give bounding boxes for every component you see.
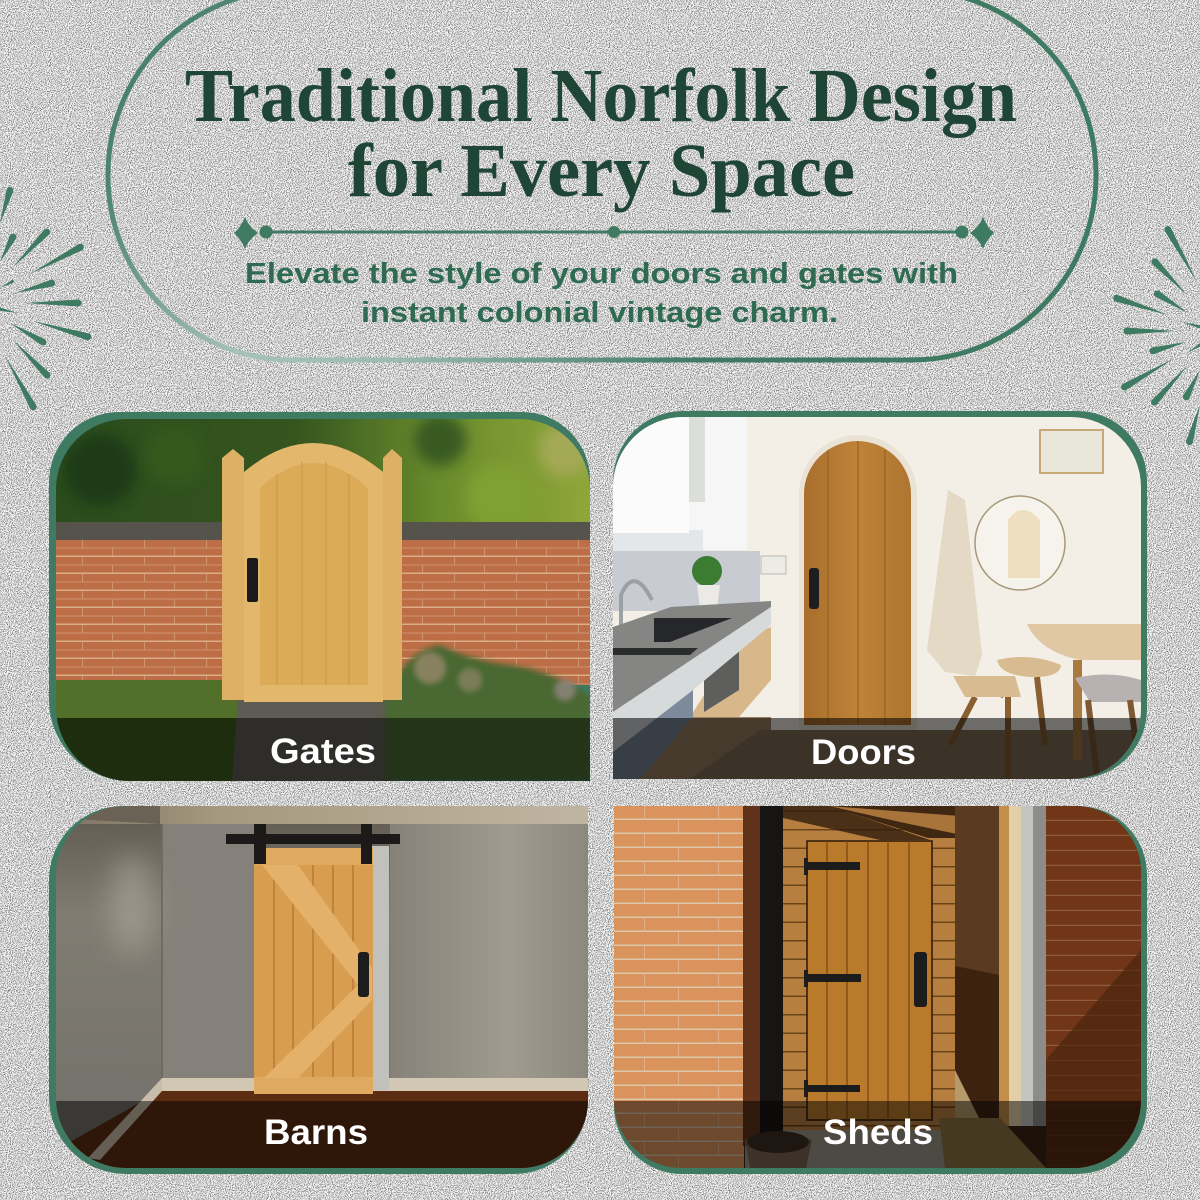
floor and baseboards [56, 1078, 588, 1168]
panel: gates [49, 412, 591, 782]
right sunburst icon [1112, 225, 1200, 446]
label band [614, 1101, 1141, 1168]
gate [222, 443, 402, 702]
label band [56, 718, 590, 781]
light switch [761, 556, 786, 574]
panel: barns [49, 806, 588, 1174]
title: Traditional Norfolk Design [185, 54, 1017, 138]
picture frame [1040, 430, 1103, 473]
right side walls [955, 806, 1141, 1168]
floor [690, 730, 1141, 779]
towel [927, 490, 982, 676]
title: for Every Space [348, 129, 855, 213]
subtitle [245, 258, 958, 329]
title [185, 54, 1017, 213]
room walls [56, 806, 588, 1168]
shed siding and roof [783, 806, 955, 1130]
left brick wall [614, 806, 783, 1168]
counter and lower cabinets [613, 601, 771, 779]
sliding barn door [254, 848, 373, 1094]
photo base [614, 806, 1141, 1168]
wall [613, 417, 1141, 779]
label: Gates: Gates [270, 732, 376, 771]
subtitle: Elevate the style of your doors and gates with [245, 258, 958, 290]
label band [56, 1101, 588, 1168]
ornamental divider [234, 217, 994, 249]
ledge door [807, 841, 932, 1120]
arched door [799, 435, 917, 730]
label: Barns: Barns [264, 1113, 368, 1152]
left sunburst icon [0, 186, 92, 411]
trees behind the wall [56, 419, 590, 522]
panel: sheds [614, 806, 1147, 1174]
panel: doors [613, 411, 1147, 779]
subtitle: instant colonial vintage charm. [361, 297, 838, 329]
label: Doors: Doors [811, 733, 916, 772]
label: Sheds: Sheds [823, 1113, 933, 1152]
open doorway [372, 846, 389, 1090]
label band [613, 718, 1141, 779]
round mirror [975, 496, 1065, 590]
ground, pot and planter [745, 1118, 1046, 1168]
hedge and ground [56, 645, 590, 782]
barn door rail and hangers [226, 824, 400, 864]
header pill outline [108, 0, 1096, 360]
brick wall [56, 522, 590, 685]
table and stools [950, 624, 1141, 779]
hinges and latch [804, 858, 927, 1097]
kitchen cabinets [613, 417, 760, 640]
